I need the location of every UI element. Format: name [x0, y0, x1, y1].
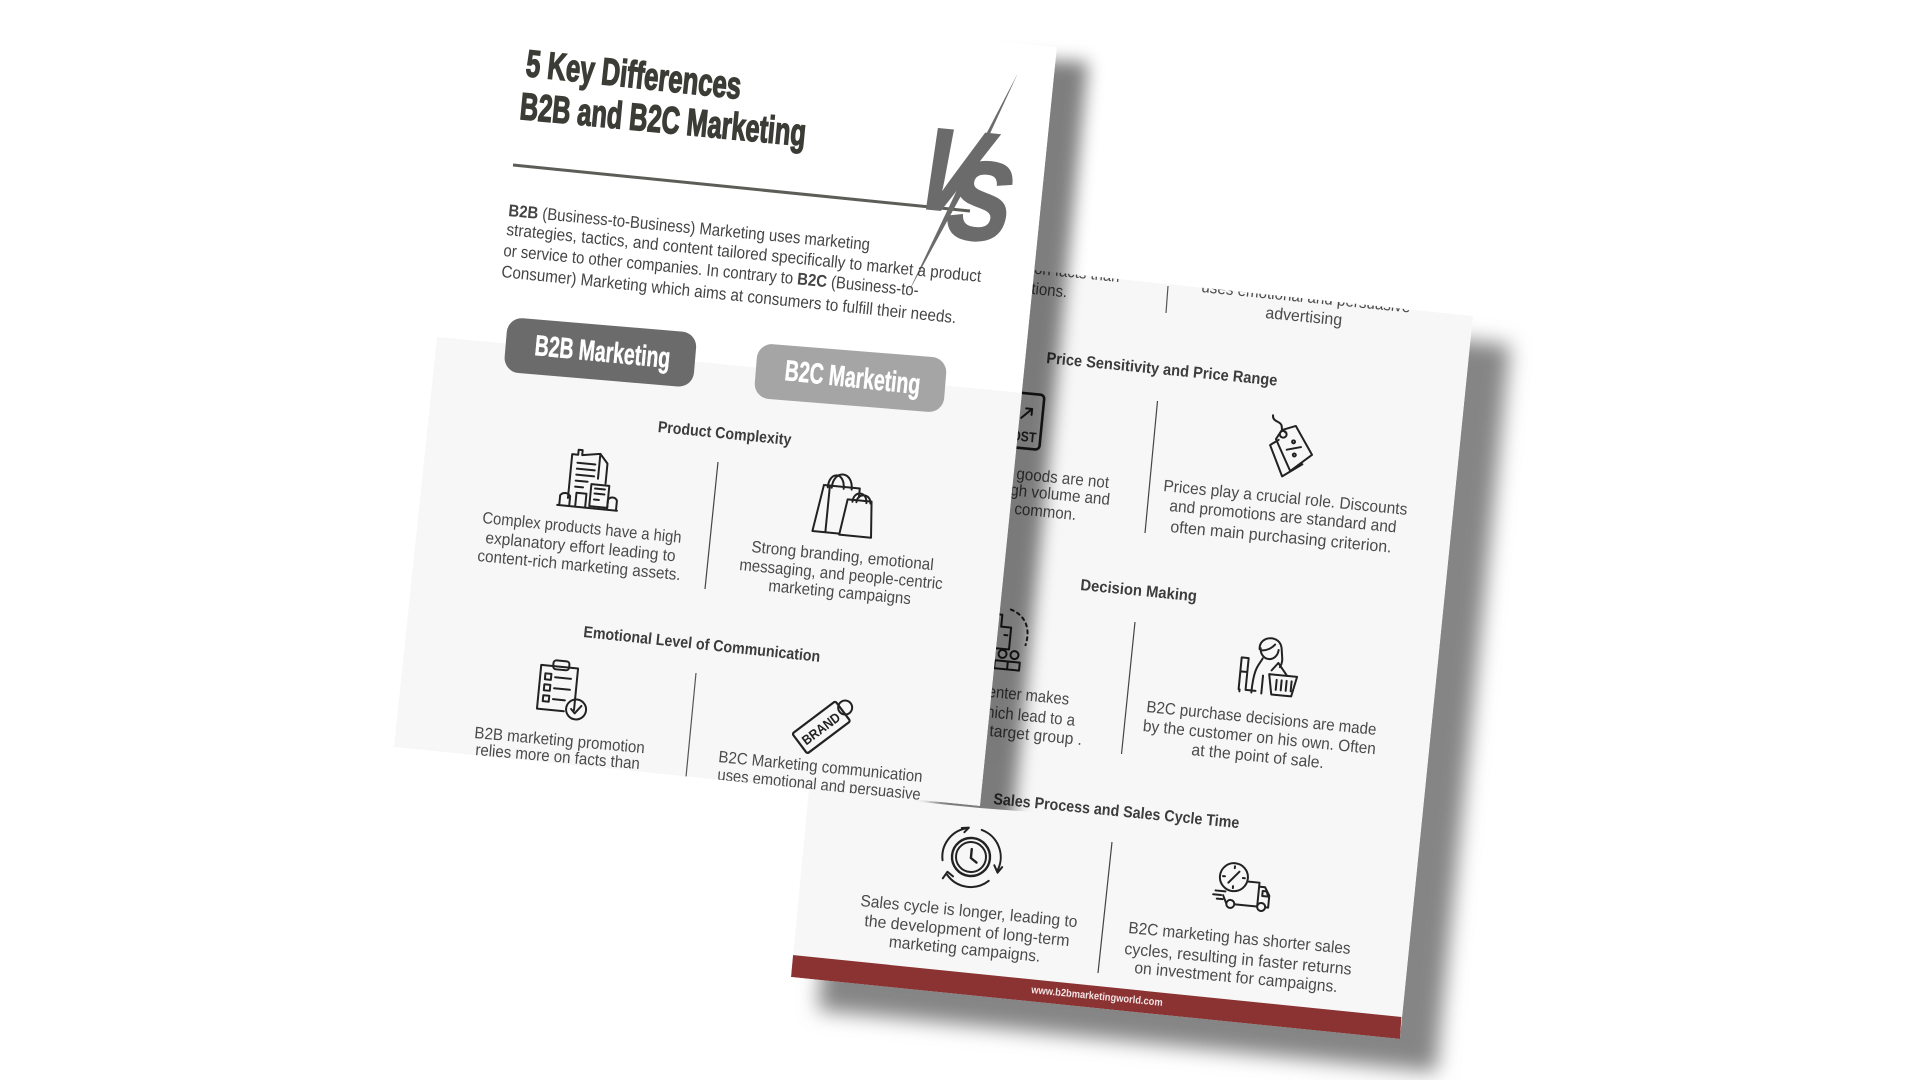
footer url: www.b2bmarketingworld.com: [1030, 984, 1163, 1009]
front page: [475, 46, 1056, 806]
icon: price tags: [1269, 414, 1313, 478]
divider: emotional: [686, 673, 696, 777]
text: sales right column: B2C marketing has shorter sales: [1128, 919, 1351, 958]
heading: product complexity: Product Complexity: [657, 419, 792, 449]
icon: delivery truck with gauge: [1212, 861, 1272, 912]
text: sales right column: on investment for campaigns.: [1134, 959, 1338, 996]
icon: company and group: [994, 608, 1029, 672]
text: price right column: Prices play a crucial role. Discounts: [1163, 477, 1408, 519]
front page shadow: [930, 58, 1088, 840]
back page: [791, 252, 1473, 1039]
button: B2B Marketing: B2B Marketing: [533, 330, 672, 375]
icon: brand tag: BRAND: [799, 709, 843, 748]
intro paragraph: or service to other companies. In contrary to B2C (Business-to-: [503, 241, 920, 300]
continued text: left column of emotional level: emotions.: [1002, 277, 1068, 301]
icon: office buildings: [557, 448, 622, 511]
icon: cost clipboard: [1016, 392, 1046, 451]
intro paragraph: B2B (Business-to-Business) Marketing uses marketing: [508, 201, 871, 254]
text: decision right column: [1142, 698, 1377, 772]
text: sales left column: the development of long-term: [864, 912, 1070, 950]
text: emotional left column: [474, 724, 646, 773]
text: product left column: content-rich marketing assets.: [477, 547, 681, 584]
icon: checklist clipboard: [536, 659, 591, 720]
text: sales left column: Sales cycle is longer, leading to: [860, 892, 1078, 931]
text: sales right column: cycles, resulting in faster returns: [1124, 940, 1352, 979]
continued text: right column of emotional level: uses emotional and persuasive: [1201, 278, 1411, 316]
back page drop shadow: [818, 280, 1510, 1072]
text: decision left column: target group .: [989, 722, 1083, 749]
icon: woman with shopping basket: [1238, 636, 1301, 697]
icon: cost clipboard: COST: [1002, 426, 1038, 445]
button: B2C Marketing: [754, 343, 947, 413]
heading: price sensitivity: Price Sensitivity and Price Range: [1046, 350, 1278, 390]
icon: clock with cycle arrows: [940, 825, 1006, 890]
text: decision right column: by the customer on his own. Often: [1142, 717, 1377, 758]
icon: brand tag: [792, 695, 859, 754]
divider: product: [705, 462, 718, 589]
text: product right column: Strong branding, emotional: [751, 538, 934, 574]
continued text: right column of emotional level: advertising: [1265, 304, 1343, 329]
text: emotional left column: B2B marketing promotion: [474, 724, 646, 757]
text: product right column: messaging, and people-centric: [739, 556, 943, 593]
text: price right column: [1163, 477, 1408, 556]
continued text: right column of emotional level: [1202, 288, 1410, 328]
heading: emotional level: Emotional Level of Communication: [583, 624, 821, 666]
intro paragraph: Consumer) Marketing which aims at consumers to fulfill their needs.: [501, 262, 957, 327]
text: decision right column: at the point of sale.: [1191, 741, 1325, 772]
text: decision left column: center makes: [980, 682, 1070, 709]
title: B2B and B2C Marketing: [518, 86, 808, 155]
text: product left column: explanatory effort leading to: [485, 529, 676, 565]
VS slash: [908, 73, 1018, 293]
VS mark: [908, 74, 1018, 292]
title: 5 Key Differences: [524, 43, 743, 108]
divider: decision: [1122, 622, 1135, 754]
intro paragraph: strategies, tactics, and content tailored specifically to market a product: [506, 220, 982, 286]
text: decision left column: which lead to a: [974, 702, 1077, 730]
text: sales left column: marketing campaigns.: [888, 933, 1041, 966]
text: price left column: high volume and: [998, 480, 1111, 509]
text: product left column: Complex products have a high: [482, 509, 682, 547]
text: product left column: [478, 512, 681, 580]
text: emotional right column: uses emotional and persuasive: [717, 766, 921, 804]
gray content panel: [932, 392, 1022, 806]
continued text: left column of emotional level: relies more on facts than: [956, 252, 1121, 286]
text: product right column: [739, 538, 943, 608]
VS mark: S: [935, 136, 1027, 265]
heading: decision making: Decision Making: [1080, 577, 1198, 605]
text: emotional right column: [717, 748, 923, 804]
button: B2B Marketing: [503, 317, 697, 388]
VS mark: V: [892, 106, 1010, 236]
text: product right column: marketing campaigns: [768, 577, 912, 608]
footer band: [791, 955, 1401, 1039]
continued text: left column of emotional level: [1032, 270, 1118, 298]
text: price left column: common.: [1014, 500, 1077, 524]
text: decision right column: B2C purchase decisions are made: [1146, 698, 1377, 739]
text: sales left column: [860, 892, 1078, 966]
text: emotional left column: relies more on facts than: [475, 741, 641, 773]
divider: sales: [1098, 842, 1112, 973]
icon: shopping bags: [812, 472, 877, 538]
text: price left column: [1011, 470, 1110, 520]
text: price right column: often main purchasing criterion.: [1170, 518, 1392, 556]
text: price right column: and promotions are standard and: [1169, 497, 1397, 536]
title rule: [513, 165, 970, 211]
text: price left column: goods are not: [1016, 465, 1110, 492]
button: B2C Marketing: B2C Marketing: [783, 355, 922, 401]
title: [518, 43, 808, 155]
intro paragraph: [501, 201, 982, 327]
text: sales right column: [1124, 919, 1352, 996]
divider: emotional level continued: [1166, 286, 1168, 313]
text: emotional right column: B2C Marketing communication: [718, 748, 923, 786]
text: decision left column: [990, 688, 1080, 747]
divider: price: [1145, 401, 1158, 533]
heading: sales process: Sales Process and Sales Cycle Time: [993, 791, 1240, 832]
